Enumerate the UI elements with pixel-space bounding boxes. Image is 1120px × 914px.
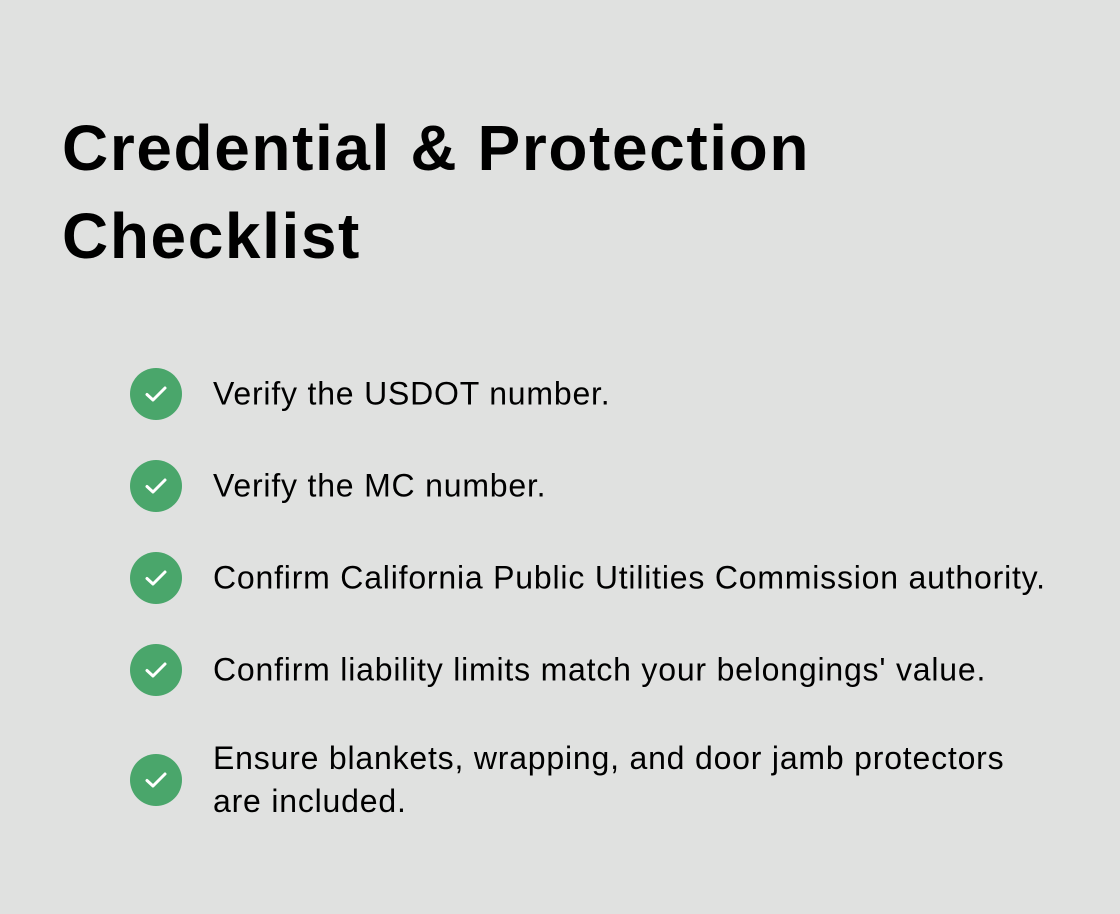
checklist item 4 — [130, 644, 986, 696]
text: liability: Confirm liability limits match your belongings' value. — [213, 652, 986, 688]
checklist item 3 — [130, 552, 1046, 604]
title: Credential & Protection — [62, 112, 810, 184]
icon: check circle — [130, 368, 182, 420]
checklist item 2 — [130, 460, 546, 512]
text: USDOT: Verify the USDOT number. — [213, 376, 610, 412]
icon: check circle — [130, 644, 182, 696]
icon: check circle — [130, 754, 182, 806]
text: CPUC: Confirm California Public Utilities Commission authority. — [213, 560, 1046, 596]
checklist item 5 — [130, 740, 1004, 819]
icon: check circle — [130, 460, 182, 512]
text: protection materials: are included. — [213, 783, 407, 819]
title: Checklist — [62, 200, 361, 272]
text: protection materials — [213, 740, 1004, 819]
title — [62, 112, 810, 272]
text: protection materials: Ensure blankets, wrapping, and door jamb protectors — [213, 740, 1004, 776]
icon: check circle — [130, 552, 182, 604]
checklist item 1 — [130, 368, 610, 420]
text: MC: Verify the MC number. — [213, 468, 546, 504]
